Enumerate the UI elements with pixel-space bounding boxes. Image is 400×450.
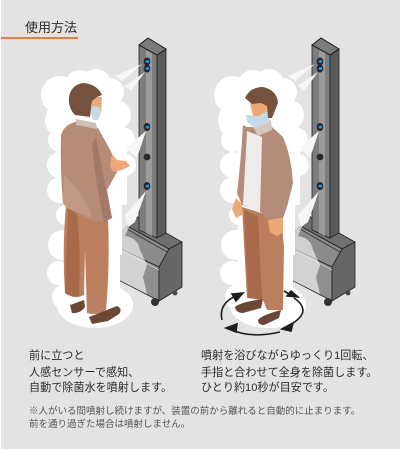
text: note — [29, 405, 360, 430]
rotation arrows — [221, 291, 303, 335]
spray jets: right — [288, 64, 319, 227]
text: note: ※人がいる間噴射し続けますが、装置の前から離れると自動的に止まります。 — [29, 405, 360, 417]
text: step two: ひとり約10秒が目安です。 — [201, 380, 334, 394]
heading — [1, 20, 78, 39]
spray cloud: left — [41, 69, 147, 328]
spray jets: left — [115, 64, 146, 227]
text: step two — [201, 348, 377, 394]
text: step one: 自動で除菌水を噴射します。 — [29, 380, 172, 394]
text: step one: 前に立つと — [29, 348, 84, 362]
text: step two: 噴射を浴びながらゆっくり1回転、 — [201, 348, 374, 362]
text: step two: 手指と合わせて全身を除菌します。 — [201, 365, 377, 379]
machine: left sanitizer tower — [109, 38, 182, 306]
spray cloud: right — [214, 69, 320, 328]
person: left, back view — [61, 83, 130, 324]
text: step one: 人感センサーで感知、 — [29, 365, 139, 379]
text: note: 前を通り過ぎた場合は噴射しません。 — [29, 418, 190, 430]
heading: 使用方法 — [25, 20, 77, 35]
machine: right sanitizer tower — [282, 38, 355, 306]
text: step one — [29, 348, 172, 394]
person: right, front view — [232, 87, 293, 325]
